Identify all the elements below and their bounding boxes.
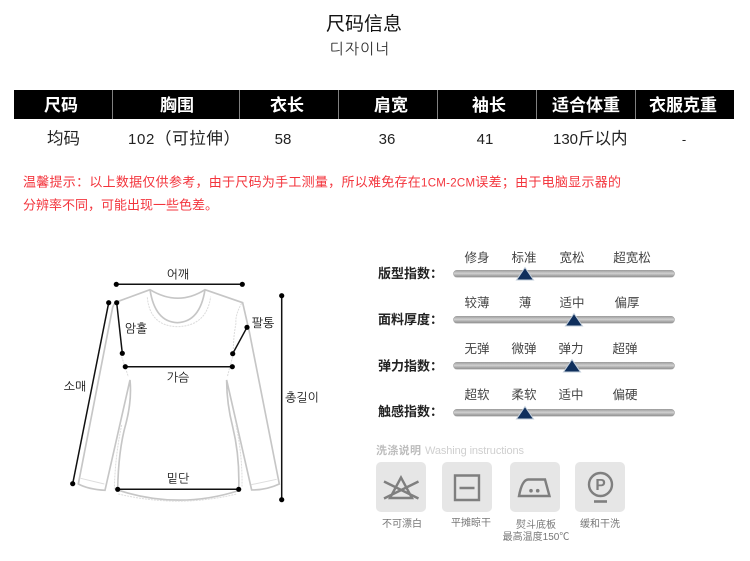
touch slider: 偏硬 [612,387,638,402]
armhole measure: 암홀 [125,322,147,336]
icon: dry flat: 平摊晾干 [451,516,491,529]
table data row: 58 [275,131,291,148]
arm width measure: 팔통 [252,316,274,330]
table header row: 胸围 [160,96,194,115]
table header row: 衣服克重 [649,95,717,115]
elasticity slider: 弹力 [558,342,584,356]
elasticity slider: 超弹 [612,341,638,356]
warm tip note [23,174,621,212]
garment measurement diagram [64,268,319,502]
table header row: 适合体重 [552,95,620,115]
icon: gentle dry clean: 缓和干洗 [580,517,620,530]
table data row: 130斤以内 [553,129,628,148]
sleeve measure [64,300,111,486]
fabric thickness slider: 较薄 [464,295,490,310]
total length measure: 총길이 [285,390,319,404]
elasticity slider: 弹力指数： [378,358,443,374]
chest measure: 가슴 [167,370,189,384]
title: 尺码信息 [326,13,402,35]
fit index slider: 超宽松 [613,250,651,265]
icon: iron: 熨斗底板 [516,518,556,531]
table data row: 41 [477,131,493,148]
hem measure: 밑단 [167,472,189,486]
touch slider: 适中 [558,387,584,402]
table header row: 袖长 [472,95,506,115]
touch slider: 触感指数： [378,404,443,419]
arm width measure [230,316,274,356]
table header row: 尺码 [44,96,78,115]
touch slider: 超软 [464,387,490,402]
fabric thickness slider: 面料厚度： [378,312,443,327]
table data row: 102（可拉伸） [128,129,240,148]
icon: gentle dry clean [575,462,625,530]
elasticity slider [378,341,674,374]
shoulder measure [114,268,245,287]
table data row [47,129,686,148]
table header row: 肩宽 [374,95,408,115]
armhole measure [114,300,147,356]
sweater outline [78,290,279,501]
table header row [14,90,734,119]
elasticity slider: 无弹 [464,342,490,356]
fit index slider [378,250,674,281]
table header row: 衣长 [270,95,304,115]
touch slider: 柔软 [511,388,537,402]
warm tip note: 分辨率不同，可能出现一些色差。 [23,198,218,212]
fit index slider: 标准 [511,251,537,265]
table data row: 均码 [47,129,80,148]
size table [14,90,734,148]
table data row: - [682,132,686,147]
table data row: 36 [379,131,395,148]
total length measure [279,293,319,502]
elasticity slider: 微弹 [511,342,537,356]
washing heading: Washing instructions [425,445,524,457]
icon: no bleach [376,462,426,530]
shoulder measure: 어깨 [167,268,189,282]
washing heading: 洗涤说明 [376,443,421,457]
fabric thickness slider [378,295,674,327]
fabric thickness slider: 适中 [559,295,585,310]
chest measure [123,364,235,384]
icon: iron: 最高温度150℃ [503,530,569,543]
washing heading [376,443,524,457]
icon: gentle dry clean: P [595,477,606,494]
icon: no bleach: 不可漂白 [382,517,422,530]
fit index slider: 修身 [464,250,490,265]
sleeve measure: 소매 [64,380,86,394]
fit index slider: 宽松 [559,250,585,265]
warm tip note: 温馨提示：以上数据仅供参考，由于尺码为手工测量，所以难免存在1CM-2CM误差；由于电脑显示器的 [23,174,621,190]
icon: iron [503,462,569,543]
subtitle: 디자이너 [330,41,390,58]
fabric thickness slider: 偏厚 [614,295,640,310]
touch slider [378,387,674,419]
fit index slider: 版型指数： [378,266,443,281]
hem measure [115,472,241,492]
fabric thickness slider: 薄 [519,295,531,310]
icon: dry flat [442,462,492,529]
